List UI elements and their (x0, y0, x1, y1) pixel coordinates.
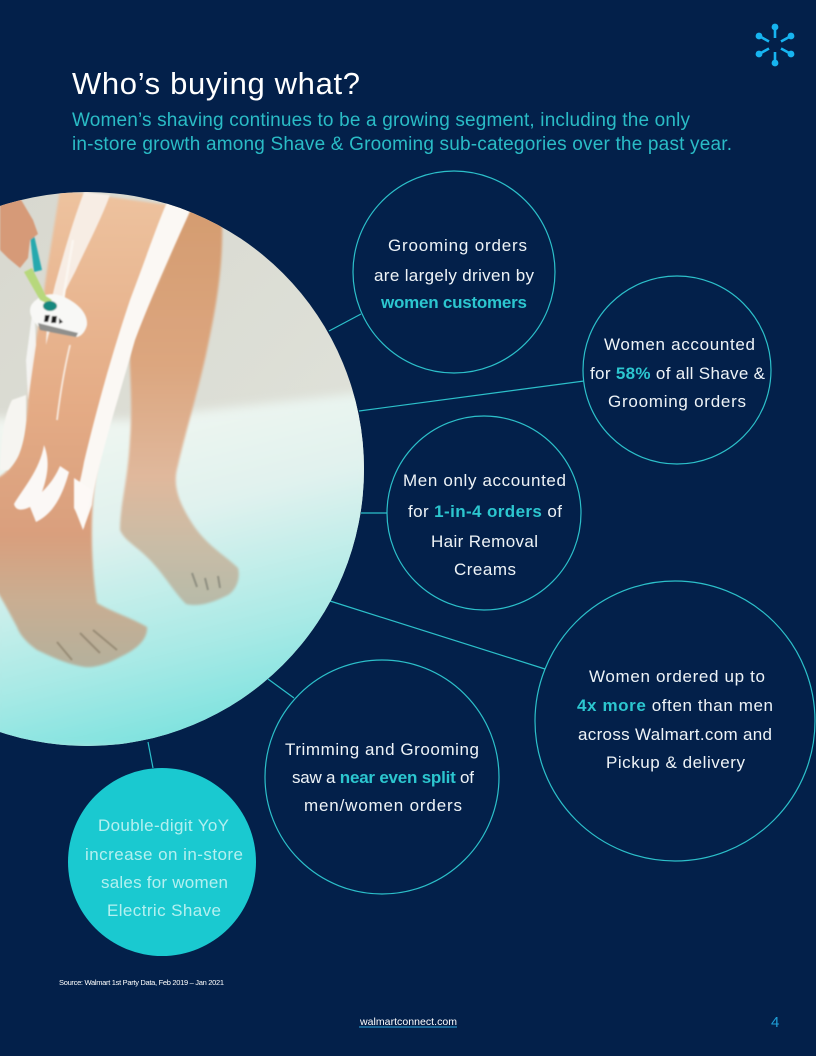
toe detail back foot (192, 573, 220, 590)
callout: trimming split: Trimming and Grooming (285, 740, 479, 759)
callout: women ordered 4x (535, 581, 815, 861)
footer link: walmartconnect.com (359, 1016, 457, 1028)
connector lines (148, 314, 584, 768)
subtitle: Women’s shaving continues to be a growing segment, including the only (72, 110, 690, 131)
callout: 58% of orders: for 58% of all Shave & (590, 364, 766, 383)
callout: electric shave filled (68, 768, 256, 956)
callout: 58% of orders (583, 276, 771, 464)
back leg (120, 208, 239, 605)
callout: electric shave filled: Double-digit YoY (98, 816, 229, 835)
callout: grooming orders (353, 171, 555, 373)
callout: men 1-in-4: Men only accounted (403, 471, 566, 490)
callout: electric shave filled: increase on in-store (85, 845, 243, 864)
callout: men 1-in-4 (387, 416, 581, 610)
subtitle (72, 110, 732, 155)
hand (0, 198, 38, 268)
callout: grooming orders: Grooming orders (388, 236, 527, 255)
callout: grooming orders: are largely driven by (374, 266, 534, 285)
callout: women ordered 4x: across Walmart.com and (578, 725, 772, 744)
callout: grooming orders: women customers (380, 293, 527, 312)
callout: 58% of orders: Women accounted (604, 335, 755, 354)
callout: electric shave filled: sales for women (101, 873, 228, 892)
callout: men 1-in-4: Creams (454, 560, 516, 579)
title: Who’s buying what? (72, 66, 360, 101)
callout: men 1-in-4: for 1-in-4 orders of (408, 502, 562, 521)
callout: trimming split: men/women orders (304, 796, 462, 815)
shaving cream stripes (76, 200, 191, 530)
page number: 4 (771, 1014, 779, 1031)
callout: 58% of orders: Grooming orders (608, 392, 746, 411)
callout: trimming split: saw a near even split of (292, 768, 474, 787)
razor (30, 294, 87, 337)
subtitle: in-store growth among Shave & Grooming sub-categories over the past year. (72, 134, 732, 155)
callout: women ordered 4x: Women ordered up to (589, 667, 765, 686)
source note: Source: Walmart 1st Party Data, Feb 2019 – Jan 2021 (59, 978, 224, 987)
callout: trimming split (265, 660, 499, 894)
callout: men 1-in-4: Hair Removal (431, 532, 538, 551)
icon: spark logo (756, 24, 794, 66)
callout: electric shave filled: Electric Shave (107, 901, 221, 920)
callout: women ordered 4x: Pickup & delivery (606, 753, 746, 772)
front leg (0, 190, 190, 667)
callout: women ordered 4x: 4x more often than men (577, 696, 773, 715)
toe detail front foot (57, 630, 117, 660)
photo: shaving legs (0, 190, 370, 750)
